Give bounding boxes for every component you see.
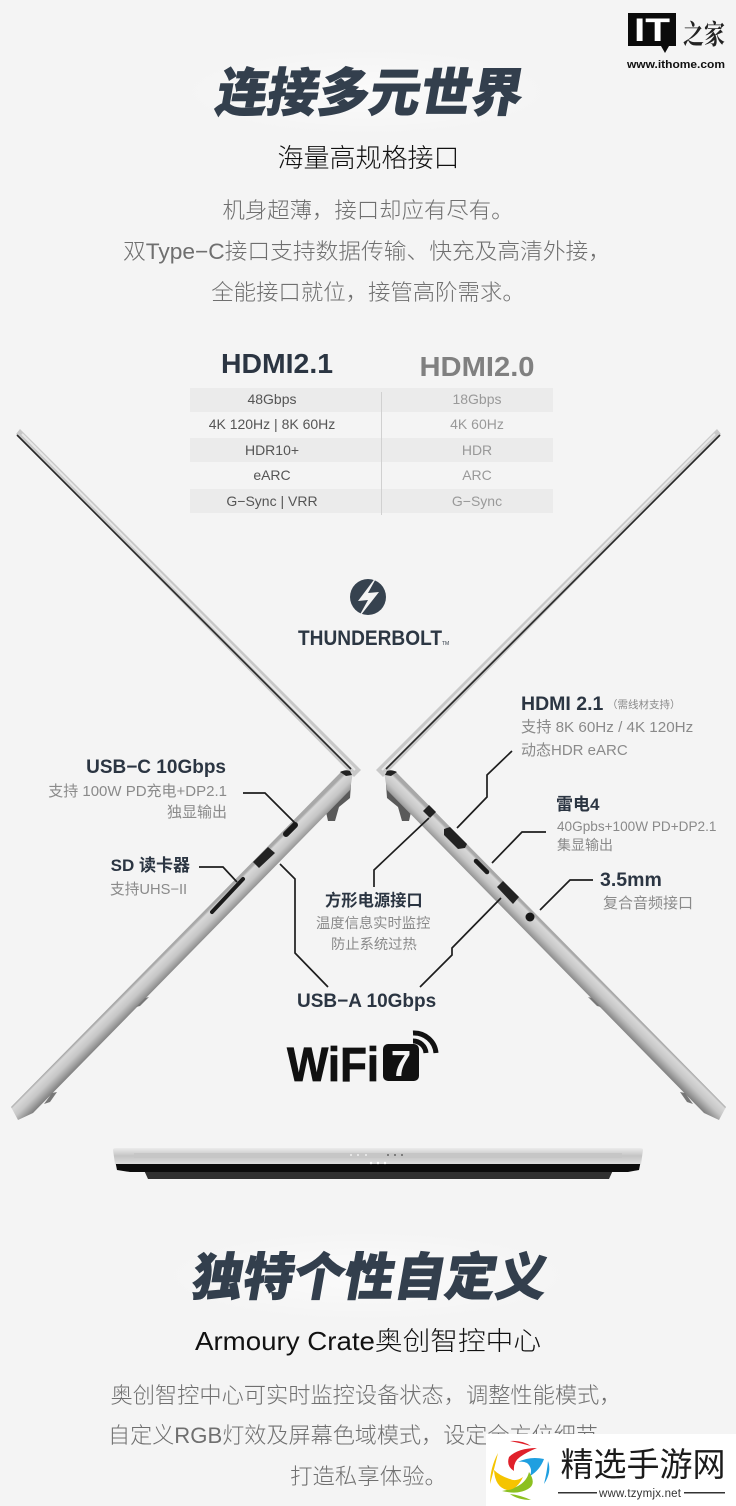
logo: ITHome bbox=[626, 12, 725, 71]
port: USB-A bbox=[497, 881, 519, 904]
left laptop bbox=[11, 429, 361, 1120]
callout: Thunderbolt 4: 雷电4 bbox=[556, 795, 600, 814]
logo: ITHome: www.ithome.com bbox=[626, 59, 725, 71]
body text: customisation: 奥创智控中心可实时监控设备状态，调整性能模式， bbox=[110, 1383, 622, 1408]
watermark: www.tzymjx.net bbox=[598, 1488, 682, 1500]
title: 独特个性自定义: 独特个性自定义 bbox=[188, 1248, 552, 1306]
callout: HDMI 2.1: HDMI 2.1 bbox=[521, 693, 604, 715]
body text: customisation: 打造私享体验。 bbox=[290, 1464, 447, 1489]
comparison table: HDMI: HDR10+ bbox=[245, 442, 299, 458]
callout: USB-C 10Gbps: 支持 100W PD充电+DP2.1 bbox=[48, 783, 227, 800]
port: audio jack bbox=[526, 912, 534, 922]
callout: Thunderbolt 4 bbox=[492, 795, 716, 863]
base bbox=[11, 771, 353, 1120]
body text: intro: 机身超薄，接口却应有尽有。 bbox=[222, 198, 514, 223]
base and foot bbox=[384, 770, 726, 1120]
callout: square power port bbox=[316, 818, 430, 953]
comparison table: HDMI: 18Gbps bbox=[452, 391, 502, 407]
heading: HDMI2.1: HDMI2.1 bbox=[221, 348, 333, 379]
logo: ITHome: IT bbox=[634, 12, 671, 48]
body text: customisation bbox=[108, 1383, 622, 1489]
body text: intro: 全能接口就位，接管高阶需求。 bbox=[211, 280, 525, 305]
callout: 3.5mm: 复合音频接口 bbox=[603, 894, 693, 912]
lid bbox=[16, 429, 361, 777]
port: USB-C bbox=[286, 825, 295, 834]
hinge and foot bbox=[326, 784, 351, 821]
laptop front view bbox=[113, 1148, 643, 1179]
callout: SD reader: SD 读卡器 bbox=[111, 856, 190, 875]
title: 独特个性自定义 bbox=[157, 1230, 577, 1322]
callout: SD reader bbox=[110, 856, 237, 898]
port: power bbox=[423, 805, 436, 818]
icon: swirl logo bbox=[490, 1441, 549, 1500]
callout: USB-C 10Gbps bbox=[48, 757, 295, 823]
callout: USB-A 10Gbps bbox=[280, 864, 501, 1012]
icon: WiFi 7: WiFi bbox=[287, 1039, 379, 1092]
watermark: 精选手游网 bbox=[560, 1446, 726, 1483]
callout: 3.5mm: 3.5mm bbox=[600, 869, 662, 891]
callout: square power port: 防止系统过热 bbox=[331, 936, 417, 953]
subtitle: Armoury Crate奥创智控中心 bbox=[195, 1326, 541, 1356]
comparison table: HDMI: G−Sync bbox=[452, 493, 502, 509]
callout: Thunderbolt 4: 40Gpbs+100W PD+DP2.1 bbox=[557, 819, 716, 834]
heading: HDMI2.0: HDMI2.0 bbox=[420, 351, 534, 382]
callout: USB-C 10Gbps: USB−C 10Gbps bbox=[86, 757, 226, 778]
comparison table: HDMI: eARC bbox=[253, 467, 291, 483]
callout: SD reader: 支持UHS−II bbox=[110, 881, 187, 898]
port: USB-A bbox=[253, 847, 275, 868]
comparison table: HDMI: 4K 120Hz | 8K 60Hz bbox=[209, 416, 335, 432]
logo: ITHome: 之家 bbox=[683, 20, 725, 50]
body text: intro bbox=[123, 198, 611, 305]
port: HDMI bbox=[444, 827, 467, 849]
port: SD slot bbox=[212, 879, 243, 912]
watermark bbox=[486, 1434, 736, 1506]
comparison table: HDMI: G−Sync | VRR bbox=[226, 493, 318, 509]
body text: customisation: 自定义RGB灯效及屏幕色域模式，设定全方位细节， bbox=[108, 1423, 620, 1448]
callout: HDMI 2.1: 支持 8K 60Hz / 4K 120Hz bbox=[521, 719, 693, 736]
callout: USB-C 10Gbps: 独显输出 bbox=[167, 804, 227, 821]
comparison table: HDMI: ARC bbox=[462, 467, 492, 483]
title: 连接多元世界: 连接多元世界 bbox=[212, 65, 528, 123]
comparison table: HDMI bbox=[190, 348, 553, 515]
callout: USB-A 10Gbps: USB−A 10Gbps bbox=[297, 991, 436, 1012]
comparison table: HDMI: 48Gbps bbox=[247, 391, 297, 407]
callout: HDMI 2.1: 动态HDR eARC bbox=[521, 742, 628, 759]
icon: Thunderbolt bbox=[298, 573, 449, 650]
comparison table: HDMI: 4K 60Hz bbox=[450, 416, 504, 432]
callout: square power port: 温度信息实时监控 bbox=[316, 915, 430, 932]
feet bbox=[44, 997, 149, 1104]
callout: 3.5mm bbox=[540, 869, 693, 912]
callout: HDMI 2.1: （需线材支持） bbox=[607, 698, 680, 711]
lid bbox=[376, 429, 721, 777]
callout: square power port: 方形电源接口 bbox=[325, 891, 423, 910]
title: 连接多元世界 bbox=[177, 48, 557, 136]
body text: intro: 双Type−C接口支持数据传输、快充及高清外接， bbox=[123, 239, 611, 264]
callout: Thunderbolt 4: 集显输出 bbox=[557, 837, 613, 853]
right laptop bbox=[376, 429, 726, 1120]
callout: HDMI 2.1 bbox=[457, 693, 693, 828]
comparison table: HDMI: HDR bbox=[462, 442, 492, 458]
wordmark: THUNDERBOLT bbox=[298, 627, 442, 650]
icon: WiFi 7 bbox=[287, 1033, 436, 1092]
port: USB-C bbox=[476, 861, 487, 872]
subtitle: 海量高规格接口 bbox=[277, 143, 460, 173]
icon: Thunderbolt: TM bbox=[442, 641, 449, 647]
icon: WiFi 7: 7 bbox=[391, 1043, 411, 1084]
